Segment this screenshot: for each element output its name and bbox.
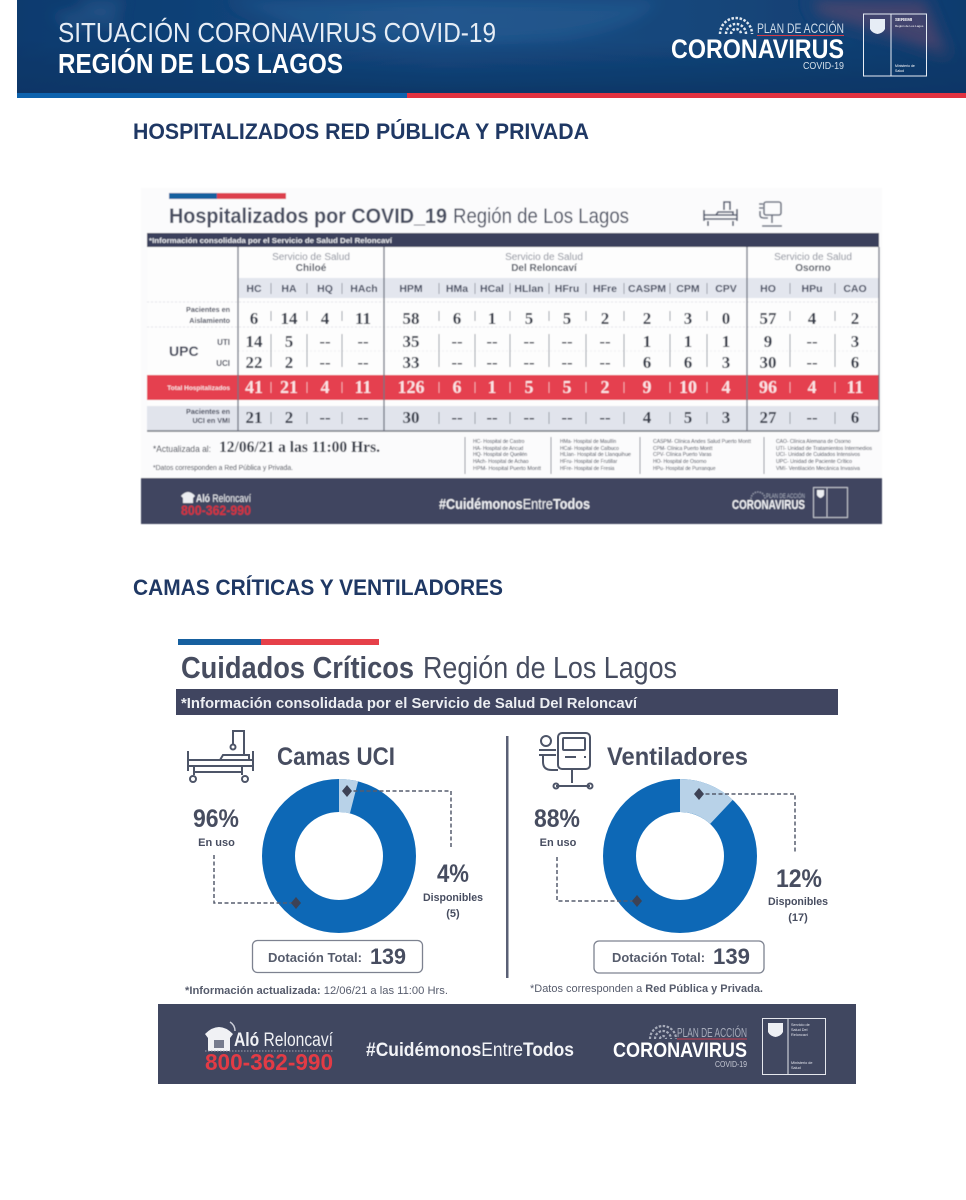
column headers: CPM (676, 283, 700, 295)
callout: 88% en uso: En uso (540, 837, 577, 849)
column headers: HAch (350, 283, 378, 295)
legend of abbreviations: CPM- Clínica Puerto Montt (653, 446, 713, 452)
update note: *Actualizada al: (153, 444, 211, 454)
row: uti (246, 332, 859, 351)
row: pacientes en aislamiento: 1 (488, 309, 496, 328)
hotline: Aló Reloncaví (234, 1030, 334, 1051)
legend of abbreviations: HO- Hospital de Osorno (653, 459, 707, 465)
logo: plan de accion coronavirus: PLAN DE ACCIÓN (677, 1025, 747, 1040)
logo: plan de accion coronavirus: CORONAVIRUS (613, 1038, 747, 1062)
legend of abbreviations (465, 437, 873, 474)
callout: 12% disponibles (694, 788, 828, 924)
row: uti: -- (599, 332, 611, 351)
row: uti: -- (451, 332, 463, 351)
total box: camas uci (252, 940, 422, 972)
row: pacientes en uci en vmi: 4 (643, 408, 652, 427)
header logo: seremi box (864, 14, 926, 76)
row: pacientes en aislamiento (250, 309, 859, 328)
row: pacientes en uci en vmi: 5 (684, 408, 692, 427)
row: uci: 6 (684, 353, 692, 372)
legend of abbreviations: HLlan- Hospital de Llanquihue (560, 452, 631, 458)
callout: 12% disponibles: 12% (776, 865, 822, 893)
divider (506, 736, 508, 978)
total box: ventiladores (594, 941, 764, 973)
info bar: *Información consolidada por el Servicio de Salud Del Reloncaví (149, 236, 393, 245)
heading: camas uci: Camas UCI (277, 743, 395, 771)
legend of abbreviations: VMI- Ventilación Mecánica Invasiva (776, 466, 860, 472)
column headers: HPM (399, 283, 423, 295)
column headers: HLlan (514, 283, 544, 295)
total box: camas uci: 139 (370, 944, 406, 969)
icon: bed small (704, 202, 737, 226)
column headers (246, 283, 867, 295)
logo: servicio de salud: Salud (791, 1066, 801, 1070)
row: pacientes en aislamiento: 6 (250, 309, 258, 328)
header logo: seremi box: Ministerio de (895, 64, 915, 68)
logo: servicio de salud: Reloncaví (791, 1033, 809, 1037)
legend of abbreviations: CAO- Clínica Alemana de Osorno (776, 439, 851, 445)
icon: hospital bed (188, 731, 253, 782)
row: pacientes en aislamiento: 4 (808, 309, 817, 328)
row labels: Pacientes en (186, 407, 230, 416)
column headers: HMa (446, 283, 468, 295)
hashtag: #CuidémonosEntreTodos (366, 1040, 574, 1061)
callout: 96% en uso (193, 805, 301, 909)
column headers: HFru (555, 283, 579, 295)
row: pacientes en aislamiento: 6 (453, 309, 461, 328)
header logo: seremi box: SEREMI (895, 17, 912, 22)
row: total hospitalizados: 6 (452, 377, 462, 397)
header banner (17, 0, 966, 98)
row: uci: 3 (722, 353, 730, 372)
row: uci: 33 (402, 353, 420, 372)
panel: cuidados criticos (158, 639, 856, 1084)
callout: 4% disponibles (342, 785, 483, 920)
row: uti: -- (319, 332, 331, 351)
update note: 12/06/21 a las 11:00 Hrs. (219, 439, 380, 456)
row: total hospitalizados: 2 (600, 377, 610, 397)
row: total hospitalizados: 10 (679, 377, 697, 397)
row labels: UTI (217, 338, 230, 347)
service headings: Chiloé (296, 263, 327, 274)
table backgrounds (147, 247, 879, 431)
row: uti: 14 (246, 332, 263, 351)
callout: 88% en uso (534, 805, 642, 907)
row: pacientes en aislamiento: 4 (321, 309, 330, 328)
callout: 4% disponibles: (5) (446, 908, 460, 920)
row: uci: 2 (285, 353, 293, 372)
row: pacientes en uci en vmi: 3 (722, 408, 730, 427)
row: uci: 30 (760, 353, 776, 372)
row: uci: -- (561, 353, 573, 372)
legend of abbreviations: HAch- Hospital de Achao (473, 459, 529, 465)
row: uci: -- (451, 353, 463, 372)
legend of abbreviations: HPM- Hospital Puerto Montt (473, 466, 542, 472)
row: pacientes en uci en vmi: -- (599, 408, 611, 427)
row: total hospitalizados: 11 (846, 377, 864, 397)
row: pacientes en aislamiento: 2 (601, 309, 609, 328)
column headers: CPV (715, 283, 737, 295)
icon: ventilator (539, 733, 592, 788)
row: uti: -- (806, 332, 818, 351)
row: uti: 1 (722, 332, 730, 351)
callout: 88% en uso: 88% (534, 805, 580, 833)
row: uci: -- (523, 353, 535, 372)
logo: plan de accion coronavirus (613, 1025, 747, 1069)
row labels: UCI en VMI (192, 416, 230, 425)
row: total hospitalizados: 5 (562, 377, 572, 397)
header logo: seremi box: Región de Los Lagos (895, 24, 924, 28)
column headers: HCal (480, 283, 504, 295)
legend of abbreviations: HFre- Hospital de Fresia (560, 466, 615, 472)
row: uci: -- (357, 353, 369, 372)
column headers: HC (246, 283, 262, 295)
legend of abbreviations: CASPM- Clínica Andes Salud Puerto Montt (653, 439, 752, 445)
info bar (176, 689, 838, 715)
panel stripe (178, 639, 379, 645)
service headings: Del Reloncaví (511, 263, 578, 274)
legend of abbreviations: HQ- Hospital de Queilén (473, 452, 527, 458)
panel title (169, 204, 629, 228)
total box: ventiladores: Dotación Total: (612, 950, 705, 965)
note: informacion actualizada: *Información actualizada: 12/06/21 a las 11:00 Hrs. (185, 985, 448, 997)
row: uci: 22 (246, 353, 262, 372)
service headings (272, 252, 852, 274)
row: total hospitalizados: 21 (280, 377, 298, 397)
legend of abbreviations: HA- Hospital de Ancud (473, 446, 524, 452)
column headers: HA (281, 283, 297, 295)
row: uci: -- (806, 353, 818, 372)
panel title: Hospitalizados por COVID_19 (169, 204, 447, 228)
hotline: 800-362-990 (205, 1049, 333, 1075)
note: datos corresponden: *Datos corresponden a Red Pública y Privada. (530, 983, 763, 995)
service headings: Servicio de Salud (774, 252, 852, 263)
row: uti: -- (523, 332, 535, 351)
row: pacientes en uci en vmi: 6 (851, 408, 859, 427)
row: pacientes en aislamiento: 58 (402, 309, 420, 328)
panel footer: #CuidémonosEntreTodos (439, 497, 590, 513)
row: total hospitalizados: 11 (354, 377, 372, 397)
legend of abbreviations: UTI- Unidad de Tratamientos Intermedios (776, 446, 873, 452)
row: pacientes en uci en vmi: -- (319, 408, 331, 427)
row: uti: -- (357, 332, 369, 351)
row: pacientes en aislamiento: 2 (643, 309, 651, 328)
row: uti: 5 (285, 332, 293, 351)
header logo: plan de accion coronavirus (671, 18, 844, 72)
row: uci: -- (319, 353, 331, 372)
icon: phone (205, 1022, 235, 1051)
callout: 4% disponibles: Disponibles (423, 892, 483, 904)
callout: 12% disponibles: (17) (788, 912, 808, 924)
row labels: UPC (169, 343, 199, 359)
total box: ventiladores: 139 (713, 944, 750, 969)
panel: hospitalizados por covid (141, 188, 882, 524)
legend of abbreviations: HMa- Hospital de Maullín (560, 439, 616, 445)
row: total hospitalizados: 1 (488, 377, 496, 397)
header stripe (17, 93, 966, 98)
column headers: HFre (593, 283, 617, 295)
row: pacientes en uci en vmi: -- (523, 408, 535, 427)
legend of abbreviations: CPV- Clínica Puerto Varas (653, 452, 712, 458)
info bar: *Información consolidada por el Servicio de Salud Del Reloncaví (181, 695, 638, 712)
row: total hospitalizados: 4 (808, 377, 816, 397)
row: uti: 35 (402, 332, 420, 351)
row: pacientes en uci en vmi: -- (451, 408, 463, 427)
row: pacientes en uci en vmi: -- (486, 408, 498, 427)
row: total hospitalizados: 41 (245, 377, 263, 397)
row: uti: -- (486, 332, 498, 351)
update note: *Datos corresponden a Red Pública y Privada. (153, 465, 293, 472)
row labels: Aislamiento (189, 316, 231, 325)
row: total hospitalizados: 9 (642, 377, 652, 397)
column headers: HQ (317, 283, 333, 295)
panel footer (141, 478, 882, 524)
row: total hospitalizados: 5 (524, 377, 534, 397)
legend of abbreviations: HPu- Hospital de Purranque (653, 466, 716, 472)
row: uci: -- (599, 353, 611, 372)
row: uci: -- (486, 353, 498, 372)
logo: servicio de salud: Servicio de (791, 1023, 810, 1027)
row: uci (246, 353, 859, 372)
row: pacientes en uci en vmi: 30 (402, 408, 420, 427)
panel footer: PLAN DE ACCIÓN (766, 493, 805, 500)
info bar (147, 233, 879, 247)
donut chart: ventiladores (620, 796, 740, 916)
hotline (205, 1030, 334, 1075)
row: uti: 1 (684, 332, 692, 351)
header logo: plan de accion coronavirus: CORONAVIRUS (671, 34, 844, 64)
row: pacientes en aislamiento: 57 (760, 309, 777, 328)
update note (153, 439, 380, 472)
callout: 12% disponibles: Disponibles (768, 896, 828, 908)
legend of abbreviations: HCal- Hospital de Calbuco (560, 446, 619, 452)
header logo: plan de accion coronavirus: PLAN DE ACCIÓN (757, 20, 844, 36)
row: pacientes en uci en vmi: 2 (285, 408, 293, 427)
column headers: HPu (802, 283, 822, 295)
service headings: Servicio de Salud (505, 252, 583, 263)
panel footer: Aló Reloncaví (196, 493, 251, 505)
logo: servicio de salud (762, 1018, 826, 1074)
callout: 96% en uso: 96% (193, 805, 239, 833)
row: pacientes en aislamiento: 14 (280, 309, 298, 328)
row: pacientes en uci en vmi: -- (561, 408, 573, 427)
callout: 4% disponibles: 4% (437, 860, 469, 888)
logo: servicio de salud: Salud Del (791, 1028, 808, 1032)
logo: servicio de salud: Ministerio de (791, 1061, 813, 1065)
row labels: Total Hospitalizados (167, 385, 230, 392)
panel title: Cuidados Críticos (181, 650, 414, 685)
row: pacientes en aislamiento: 5 (563, 309, 571, 328)
legend of abbreviations: HFru- Hospital de Frutillar (560, 459, 618, 465)
row: pacientes en aislamiento: 11 (355, 309, 371, 328)
row: total hospitalizados: 96 (759, 377, 777, 397)
row: total hospitalizados: 126 (398, 377, 424, 397)
row: total hospitalizados: 4 (320, 377, 330, 397)
row: uti: 1 (643, 332, 651, 351)
footer bar (158, 1004, 856, 1084)
panel stripe (169, 193, 286, 199)
panel title: Región de Los Lagos (423, 650, 677, 685)
heading: hospitalizados: HOSPITALIZADOS RED PÚBLICA Y PRIVADA (133, 119, 589, 144)
icon: phone small (181, 492, 195, 503)
row: pacientes en aislamiento: 3 (684, 309, 692, 328)
row labels: Pacientes en (186, 305, 230, 314)
row: pacientes en aislamiento: 2 (851, 309, 859, 328)
row: pacientes en uci en vmi (246, 408, 859, 427)
header title: SITUACIÓN CORONAVIRUS COVID-19 (58, 17, 496, 48)
column headers: HO (760, 283, 776, 295)
row: pacientes en aislamiento: 5 (525, 309, 533, 328)
row: pacientes en uci en vmi: -- (806, 408, 818, 427)
row labels: UCI (216, 359, 230, 368)
donut chart: camas uci (278, 796, 400, 916)
row: uti: 9 (764, 332, 772, 351)
row: uci: 6 (851, 353, 859, 372)
column separators (271, 283, 835, 424)
logo: plan de accion coronavirus: COVID-19 (715, 1059, 747, 1069)
row: uti: -- (561, 332, 573, 351)
row: uti: 3 (851, 332, 859, 351)
legend of abbreviations: UCI- Unidad de Cuidados Intensivos (776, 452, 861, 458)
service headings: Servicio de Salud (272, 252, 350, 263)
header logo: seremi box: Salud (895, 69, 904, 73)
header title (58, 17, 496, 79)
total box: camas uci: Dotación Total: (268, 950, 362, 965)
heading: ventiladores: Ventiladores (607, 743, 748, 771)
row: uci: 6 (643, 353, 651, 372)
column headers: CASPM (628, 283, 666, 295)
panel title (181, 650, 677, 685)
column headers: CAO (843, 283, 867, 295)
panel footer: 800-362-990 (181, 502, 251, 518)
callout: 96% en uso: En uso (198, 837, 235, 849)
row: pacientes en uci en vmi: 21 (246, 408, 262, 427)
row: pacientes en uci en vmi: -- (357, 408, 369, 427)
row labels (167, 305, 231, 425)
panel footer: CORONAVIRUS (732, 498, 805, 512)
row: total hospitalizados: 4 (722, 377, 730, 397)
legend of abbreviations: HC- Hospital de Castro (473, 439, 525, 445)
row: total hospitalizados (245, 377, 864, 397)
panel title: Región de Los Lagos (453, 204, 629, 228)
service headings: Osorno (795, 263, 831, 274)
icon: ventilator small (759, 202, 782, 226)
legend of abbreviations: UPC- Unidad de Paciente Crítico (776, 459, 852, 465)
header title: REGIÓN DE LOS LAGOS (58, 48, 343, 79)
row: pacientes en aislamiento: 0 (722, 309, 730, 328)
header logo: plan de accion coronavirus: COVID-19 (803, 61, 844, 72)
heading: camas criticas: CAMAS CRÍTICAS Y VENTILADORES (133, 575, 503, 600)
row: pacientes en uci en vmi: 27 (760, 408, 777, 427)
